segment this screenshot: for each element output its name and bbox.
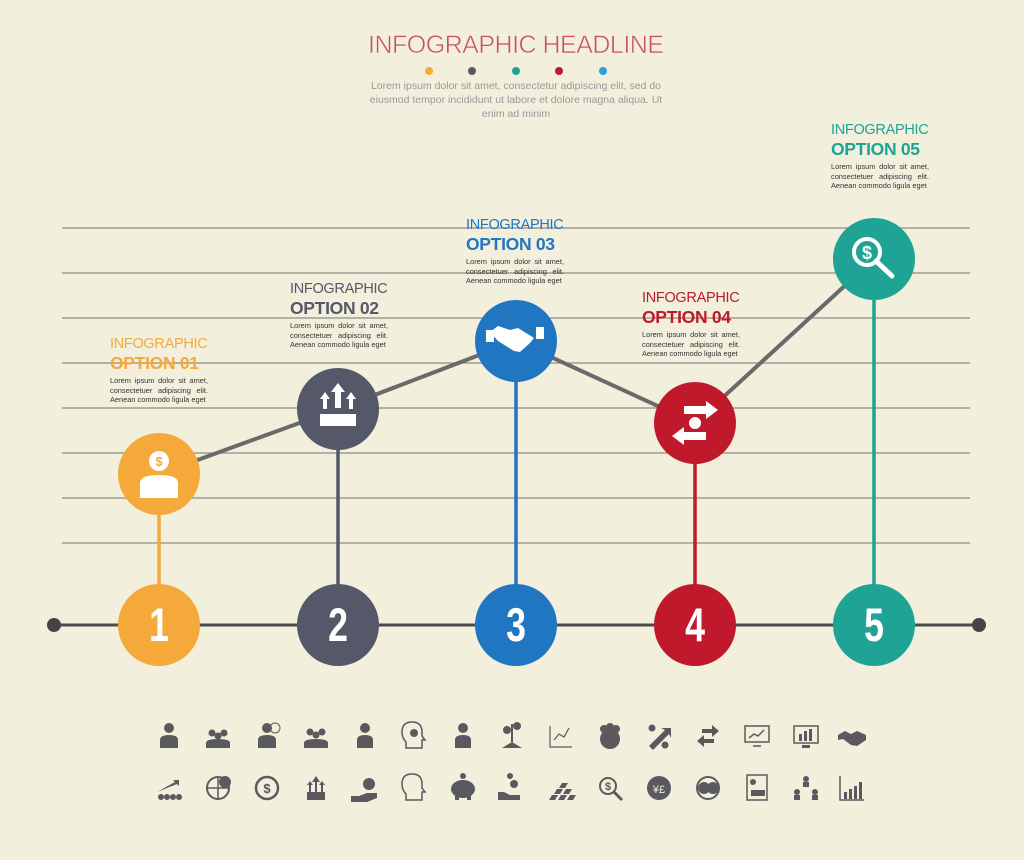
- node 4: exchange icon: [654, 382, 736, 464]
- icon row 2: ¥£: [652, 784, 665, 796]
- node 5: search money icon: [833, 218, 915, 300]
- option 02 text: OPTION 02: [290, 298, 379, 318]
- option 02 text: INFOGRAPHIC: [290, 281, 387, 297]
- title: INFOGRAPHIC HEADLINE: [368, 31, 664, 59]
- option 02 text: [290, 281, 388, 349]
- node 3: handshake icon: [475, 300, 557, 382]
- option 03 text: INFOGRAPHIC: [466, 217, 563, 233]
- option 04 text: Lorem ipsum dolor sit amet, consectetuer adipiscing elit. Aenean commodo ligula eget: [642, 330, 740, 358]
- subtitle: [370, 80, 662, 120]
- color dots: [425, 67, 607, 75]
- option 03 text: Lorem ipsum dolor sit amet, consectetuer adipiscing elit. Aenean commodo ligula eget: [466, 257, 564, 285]
- node 2: arrows money icon: [297, 368, 379, 450]
- option 05 text: INFOGRAPHIC: [831, 122, 928, 138]
- option 02 text: Lorem ipsum dolor sit amet, consectetuer adipiscing elit. Aenean commodo ligula eget: [290, 321, 388, 349]
- option 01 text: OPTION 01: [110, 353, 199, 373]
- option 05 text: Lorem ipsum dolor sit amet, consectetuer adipiscing elit. Aenean commodo ligula eget: [831, 162, 929, 190]
- option 01 text: INFOGRAPHIC: [110, 336, 207, 352]
- subtitle: enim ad minim: [482, 108, 550, 120]
- node 5: search money icon: $: [862, 243, 872, 263]
- icon row 2: $: [605, 781, 611, 793]
- node 1: businessman icon: [118, 433, 200, 515]
- option 04 text: INFOGRAPHIC: [642, 290, 739, 306]
- option 01 text: [110, 336, 208, 404]
- option 03 text: OPTION 03: [466, 234, 555, 254]
- icon row 2: [157, 773, 864, 802]
- option 05 text: [831, 122, 929, 190]
- icon row 1: [160, 722, 866, 750]
- option 04 text: OPTION 04: [642, 307, 731, 327]
- number circles: 4: [685, 598, 705, 651]
- number circles: 3: [506, 598, 526, 651]
- timeline axis: [47, 618, 986, 632]
- icon row 2: $: [263, 781, 271, 796]
- option 03 text: [466, 217, 564, 285]
- stems: [159, 259, 874, 625]
- number circles: 1: [149, 598, 169, 651]
- number circles: [118, 584, 915, 666]
- option 04 text: [642, 290, 740, 358]
- subtitle: Lorem ipsum dolor sit amet, consectetur adipiscing elit, sed do: [371, 80, 661, 92]
- option 01 text: Lorem ipsum dolor sit amet, consectetuer adipiscing elit. Aenean commodo ligula eget: [110, 376, 208, 404]
- trend line: [159, 259, 874, 474]
- option 05 text: OPTION 05: [831, 139, 920, 159]
- grid lines: [62, 228, 970, 543]
- node 1: businessman icon: $: [155, 454, 163, 469]
- number circles: 5: [864, 598, 884, 651]
- number circles: 2: [328, 598, 348, 651]
- subtitle: eiusmod tempor incididunt ut labore et dolore magna aliqua. Ut: [370, 94, 662, 106]
